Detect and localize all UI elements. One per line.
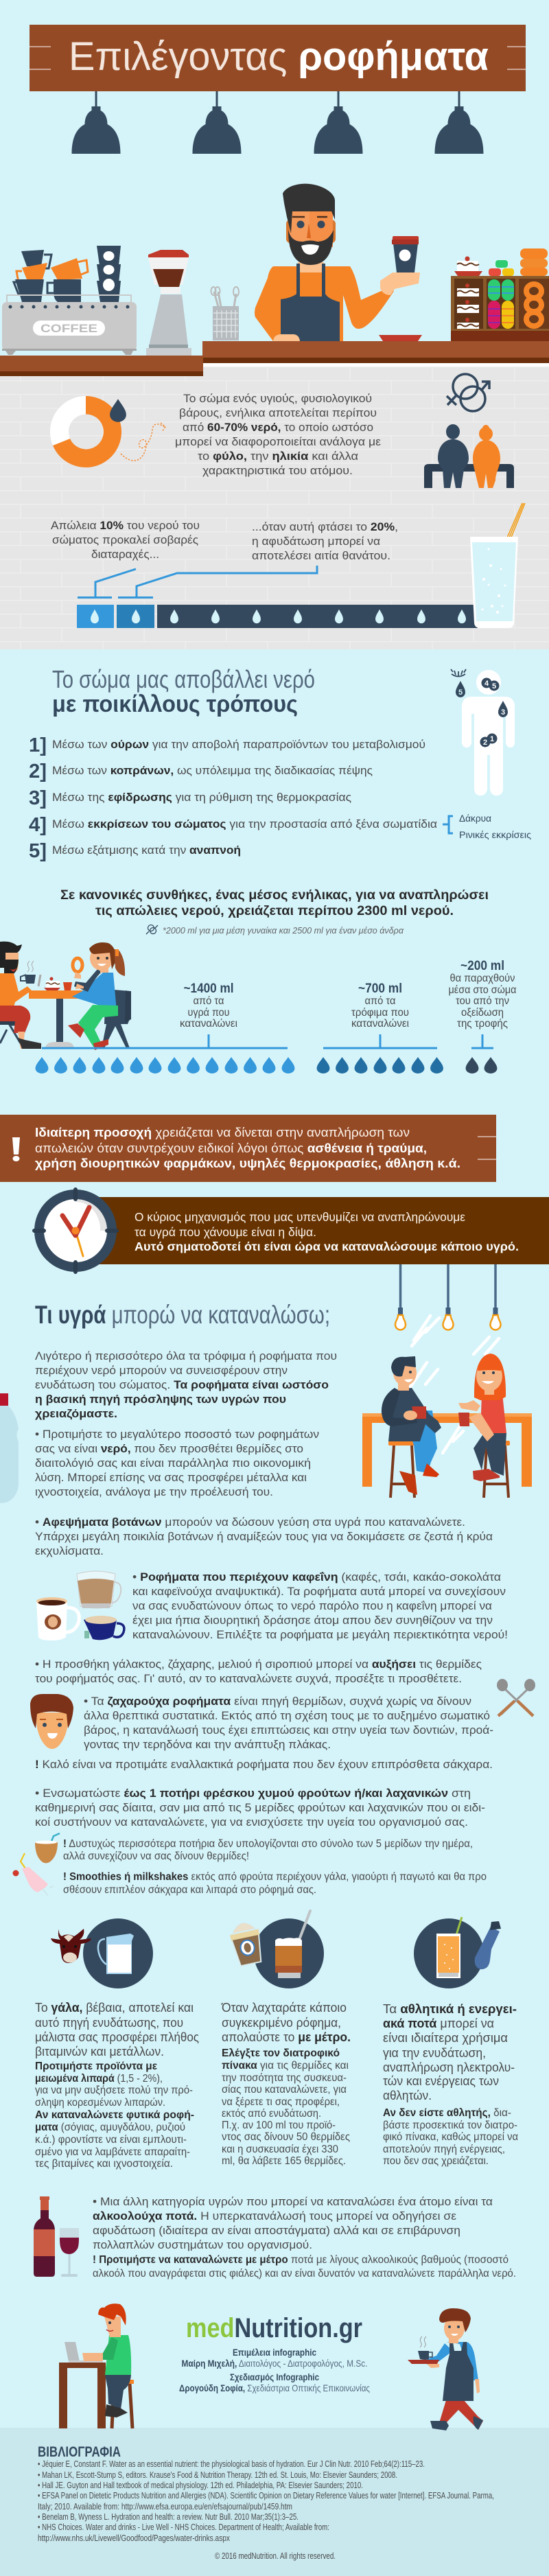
stat: 1400 ml: ~1400 ml: [184, 982, 233, 996]
column: moderation: εκτός από ενυδάτωση.: [222, 2108, 321, 2120]
column: milk: Προτιμήστε προϊόντα με: [35, 2061, 158, 2072]
secretions bracket: Ρινικές εκκρίσεις: [459, 829, 531, 840]
stat: 200 ml: του από την: [456, 995, 509, 1007]
pendant bulbs: [395, 1264, 501, 1330]
window reflections: [408, 1316, 499, 1453]
icon: exclamation: [12, 1137, 20, 1161]
body figure with numbered drops: 5: [458, 688, 463, 697]
water bar with drops: [77, 605, 478, 628]
column: milk: για να μην αυξήσετε πολύ την πρό-: [35, 2085, 193, 2096]
list: ways of losing water: [29, 734, 437, 862]
icon: coffee drinks: [229, 1911, 324, 1988]
paragraph: juice: • Ενσωματώστε έως 1 ποτήρι φρέσκου χυμού φρούτων ή/και λαχανικών στη: [35, 1787, 471, 1800]
macarons: [495, 260, 508, 268]
paragraph: water: σας να είναι νερό, που δεν προσθέτει θερμίδες στο: [35, 1442, 303, 1455]
stat: 1400 ml: καταναλώνει: [180, 1018, 237, 1030]
water loss text left: [51, 519, 200, 561]
column: milk: βιταμινών και μετάλλων.: [35, 2045, 164, 2058]
stat: 200 ml: οξείδωση: [461, 1007, 504, 1019]
column: milk: Το γάλα, βέβαια, αποτελεί και: [35, 2001, 194, 2015]
paragraph: all foods with water: η βασική πηγή πρόσληψης των υγρών που: [35, 1393, 286, 1406]
paragraph: herbal infusions: εκχυλίσματα.: [35, 1544, 104, 1557]
woman: [474, 1433, 506, 1476]
stools: [390, 1446, 509, 1498]
special attention banner: [0, 1115, 496, 1182]
column: milk: ματα (σόγιας, αμυγδάλου, ρυζιού: [35, 2122, 185, 2133]
special attention banner: απωλειών όταν συντρέχουν ειδικοί λόγοι όπως ασθένεια ή τραύμα,: [35, 1141, 427, 1155]
paragraph: additions: του ροφήματός σας. Γι' αυτό, αν το καταναλώνετε συχνά, προσέξτε τι προσθέτετε.: [35, 1672, 462, 1685]
column: milk: κ.ά.) φροντίστε να είναι εμπλουτι-: [35, 2134, 187, 2146]
woman: [104, 989, 131, 1024]
body figure with numbered drops: 1: [490, 735, 494, 743]
credits: Σχεδιασμός Infographic: [230, 2371, 319, 2382]
column: moderation: την ποσότητα της συσκευα-: [222, 2072, 347, 2084]
stat: 200 ml: ~200 ml: [460, 959, 504, 973]
footnote: *2000 ml για μια μέση γυναίκα και 2500 ml για έναν μέσο άνδρα: [163, 925, 404, 936]
donuts on top: [520, 248, 548, 276]
water glass with straws: [470, 503, 525, 628]
column: moderation: πίνακα για τις θερμίδες και: [222, 2060, 349, 2072]
column: sports drinks: ακά ποτά μπορεί να: [383, 2017, 494, 2030]
donut chart 60-70%: [50, 396, 126, 467]
paragraph: juice: καθημερινή σας δίαιτα, σαν μια από τις 5 μερίδες φρούτων και λαχανικών που οι ειδι-: [35, 1801, 485, 1814]
list: ways of losing water: 3]: [29, 787, 47, 809]
paragraph: juice: κοί συστήνουν να καταναλώνετε, για να ενισχύσετε την υγεία του οργανισμού σας.: [35, 1815, 468, 1829]
paragraph: herbal infusions: • Αφεψήματα βοτάνων μπορούν να δώσουν γεύση στα υγρά που καταναλώνετε.: [35, 1516, 465, 1529]
paragraph: additions: • Η προσθήκη γάλακτος, ζάχαρης, μελιού ή σιροπιού μπορεί να αυξήσει τις θερμίδες: [35, 1658, 482, 1671]
logo: medNutrition.gr: [186, 2313, 362, 2343]
icon: wine bottle and glass: [34, 2196, 79, 2277]
column: milk: μάλιστα σας προσφέρει πλήθος: [35, 2030, 199, 2044]
paragraph: all foods with water: [35, 1349, 337, 1420]
stat: 1400 ml: από τα: [194, 995, 224, 1007]
column: moderation: απολαύστε το με μέτρο.: [222, 2030, 351, 2044]
stat: 1400 ml: υγρά που: [188, 1007, 229, 1019]
paragraph: all foods with water: χρειαζόμαστε.: [35, 1407, 117, 1420]
intro text: Το σώμα ενός υγιούς, φυσιολογικού: [183, 392, 372, 405]
list: ways of losing water: Μέσω της εφίδρωσης για τη ρύθμιση της θερμοκρασίας: [52, 791, 351, 804]
illustration: waiter: [408, 2308, 483, 2430]
bibliography: • Hall JE. Guyton and Hall textbook of medical physiology. 12th ed. Philadelphia, PA: Elsevier Saunders; 2010.: [38, 2481, 363, 2490]
stat: 700 ml: από τα: [365, 995, 396, 1007]
cake cabinet: [451, 248, 549, 341]
stat: 700 ml: ~700 ml: [358, 982, 402, 996]
man: [0, 942, 22, 968]
column: sports drinks: [383, 2002, 518, 2167]
column: sports drinks: που δεν σας χρειάζεται.: [383, 2155, 489, 2167]
paragraph: all foods with water: Λιγότερο ή περισσότερο όλα τα τρόφιμα ή ροφήματα που: [35, 1349, 337, 1362]
column: moderation: Ελέγξτε τον διατροφικό: [222, 2047, 340, 2059]
body figure with numbered drops: 3: [501, 708, 505, 717]
column: moderation: να ξέρετε τι σας προφέρει,: [222, 2096, 340, 2108]
icon: milk: [51, 1918, 153, 1988]
column: moderation: σίας που καταναλώνετε, για: [222, 2084, 347, 2096]
thirst banner: Αυτό σηματοδοτεί ότι είναι ώρα να καταναλώσουμε κάποιο υγρό.: [135, 1240, 519, 1253]
paragraph: water: ιχνοστοιχεία, ανάλογα με την προέλευσή του.: [35, 1485, 273, 1498]
note: more glasses: ! Δυστυχώς περισσότερα ποτήρια δεν υπολογίζονται στο σύνολο των 5 μερίδων την ημέρα,: [63, 1838, 473, 1850]
intro text: μπορεί να διαφοροποιείται ανάλογα με: [175, 435, 381, 448]
drop rows: [36, 1057, 497, 1074]
column: moderation: ντος σας δίνουν 50 θερμίδες: [222, 2131, 350, 2143]
secretions bracket: [443, 813, 531, 840]
dashed arrow: [121, 423, 165, 461]
items on table: [25, 975, 36, 984]
paragraph: caffeine: καταναλώνουν. Επιλέξτε τα ροφήματα με μεγάλη περιεκτικότητα νερού!: [132, 1628, 508, 1641]
coffee machine: [2, 295, 137, 355]
body figure with numbered drops: [451, 669, 515, 796]
column: sports drinks: Τα αθλητικά ή ενεργει-: [383, 2002, 517, 2016]
barista: [255, 184, 420, 341]
stat: 200 ml: μέσα στο σώμα: [449, 984, 517, 996]
paragraph: herbal infusions: [35, 1516, 493, 1557]
list: ways of losing water: 4]: [29, 814, 47, 836]
icon: elderly couple on bench: [424, 424, 514, 488]
column: moderation: Όταν λαχταράτε κάποιο: [221, 2001, 347, 2015]
list: ways of losing water: Μέσω εκκρίσεων του σώματος για την προστασία από ξένα σωματίδια: [52, 817, 437, 831]
apron: [281, 264, 340, 341]
paragraph: sugary drinks: άλλα θρεπτικά συστατικά. Εκτός από τη σχέση τους με το αυξημένο σωματικό: [84, 1709, 490, 1722]
paragraph: sugary drinks: • Τα ζαχαρούχα ροφήματα είναι πηγή θερμίδων, συχνά χωρίς να δίνουν: [84, 1695, 471, 1708]
bibliography: http://www.nhs.uk/Livewell/Goodfood/Pages/water-drinks.aspx: [38, 2533, 231, 2543]
list: ways of losing water: 1]: [29, 734, 47, 756]
paragraph: alcohol: • Μια άλλη κατηγορία υγρών που μπορεί να καταναλώσει ένα άτομο είναι τα: [93, 2195, 493, 2208]
icon: juice cup: [35, 1833, 60, 1863]
icon: sports drinks: [414, 1917, 501, 1988]
paragraph: sugary drinks: [84, 1695, 493, 1751]
illustration: man with laptop: [59, 2304, 134, 2428]
column: sports drinks: τών και ενέργειας των: [383, 2074, 499, 2088]
special attention banner: Ιδιαίτερη προσοχή χρειάζεται να δίνεται στην αναπλήρωση των: [35, 1126, 410, 1139]
body figure with numbered drops: 5: [492, 682, 496, 691]
column: moderation: Π.χ. αν 100 ml του προϊό-: [222, 2120, 336, 2131]
paragraph: all foods with water: περιέχουν νερό μπορούν να συνεισφέρουν στην: [35, 1364, 288, 1377]
intro text: από 60-70% νερό, το οποίο ωστόσο: [183, 421, 373, 434]
note: more glasses: [63, 1838, 473, 1862]
paragraph: alcohol: αλκοόλ που αναγράφεται στις φιάλες) και αν είναι δυνατόν να καταναλώνετε παράλληλα νερό.: [93, 2268, 516, 2279]
column: sports drinks: βάστε προσεκτικά τον διατρο-: [383, 2120, 517, 2131]
water loss text right: [252, 520, 398, 562]
stat: 700 ml: τρόφιμα που: [351, 1007, 409, 1019]
icon: smoothie glass: [12, 1853, 54, 1896]
list: ways of losing water: Μέσω των κοπράνων, ως υπόλειμμα της διαδικασίας πέψης: [52, 764, 373, 777]
credits: Επιμέλεια infographic: [233, 2347, 316, 2358]
column: moderation: και η συσκευασία έχει 330: [222, 2144, 338, 2155]
column: milk: μειωμένα λιπαρά (1,5 - 2%),: [35, 2073, 163, 2085]
column: sports drinks: Αν δεν είστε αθλητής, δια-: [383, 2107, 511, 2119]
water loss text right: αποτελέσει αιτία θανάτου.: [252, 549, 390, 562]
heading: what can I drink: Τι υγρά μπορώ να καταναλώσω;: [35, 1301, 330, 1329]
footer background: [0, 2428, 549, 2576]
table: [362, 1413, 532, 1423]
column: milk: τες βιταμίνες και ιχνοστοιχεία.: [35, 2158, 173, 2170]
paragraph: all foods with water: ενυδάτωση του σώματος. Τα ροφήματα είναι ωστόσο: [35, 1378, 329, 1391]
title banner: [30, 25, 526, 91]
paragraph: alcohol: ! Προτιμήστε να καταναλώνετε με μέτρο ποτά με λίγους αλκοολικούς βαθμούς (ποσοστό: [93, 2254, 509, 2266]
paragraph: caffeine: [132, 1570, 508, 1641]
column: moderation: [221, 2001, 351, 2167]
coffee machine: COFFEE: [40, 322, 97, 335]
stat: 700 ml: καταναλώνει: [351, 1018, 409, 1030]
replacement statement: τις απώλειες νερού, χρειάζεται περίπου 2300 ml νερού.: [95, 904, 454, 918]
column: milk: σληψη κορεσμένων λιπαρών.: [35, 2097, 165, 2109]
body figure with numbered drops: 4: [484, 680, 489, 688]
icon: eye: [451, 669, 466, 677]
icon: boy face: [30, 1694, 73, 1749]
counter: [0, 341, 549, 376]
column: sports drinks: για την ενυδάτωση,: [383, 2046, 486, 2060]
stat: 200 ml: της τροφής: [457, 1018, 508, 1030]
connector lines: [78, 566, 317, 597]
water loss text right: η αφυδάτωση μπορεί να: [252, 535, 380, 548]
cake: [457, 261, 478, 271]
bibliography: Italy; 2010. Available from: http://www.efsa.europa.eu/en/efsajournal/pub/1459.htm: [38, 2502, 292, 2511]
paragraph: caffeine: και καφεϊνούχα αναψυκτικά). Τα ροφήματα αυτά μπορεί να συνεχίσουν: [132, 1585, 506, 1598]
list: ways of losing water: 5]: [29, 840, 47, 862]
paragraph: water: λύση. Μπορεί επίσης να σας προσφέρει μέταλλα και: [35, 1471, 307, 1484]
secretions bracket: Δάκρυα: [459, 813, 491, 824]
water loss text left: Απώλεια 10% του νερού του: [51, 519, 200, 532]
title: Επιλέγοντας ροφήματα: [69, 34, 489, 79]
column: moderation: συγκεκριμένο ρόφημα,: [222, 2016, 341, 2030]
stat: 1400 ml: [180, 982, 237, 1030]
hanging lamps: [71, 91, 483, 154]
saucer: [379, 335, 422, 341]
water loss text left: σώματος προκαλεί σοβαρές: [52, 533, 198, 546]
column: moderation: ml, θα λάβετε 165 θερμίδες.: [222, 2155, 346, 2167]
paragraph: additions: [35, 1658, 482, 1685]
list: ways of losing water: Μέσω εξάτμισης κατά την αναπνοή: [52, 844, 241, 857]
shirt and arms: [255, 266, 394, 341]
man: [401, 1411, 437, 1473]
paragraph: alcohol: πολλαπλών συστημάτων του οργανισμού.: [93, 2238, 312, 2251]
consumption brackets: [42, 1034, 493, 1049]
bibliography: [38, 2444, 494, 2543]
icon: gender symbols: [447, 374, 489, 411]
paragraph: caffeine: • Ροφήματα που περιέχουν καφεΐνη (καφές, τσάι, κακάο-σοκολάτα: [132, 1570, 501, 1583]
bibliography: • NHS Choices. Water and drinks - Live Well - NHS Choices. Department of Health; Available from:: [38, 2522, 329, 2532]
column: sports drinks: φικό πίνακα, καθώς μπορεί να: [383, 2131, 518, 2143]
water bottle: [0, 1393, 19, 1503]
intro text: βάρους, ενήλικα αποτελείται περίπου: [179, 406, 377, 419]
bibliography: • Mahan LK, Escott-Stump S, editors. Krause's Food & Nutrition Therapy. 12th ed. St. Louis, Mo: Elsevier Saunders; 2008.: [38, 2470, 397, 2480]
credits: Δρογούδη Σοφία, Σχεδιάστρια Οπτικής Επικοινωνίας: [179, 2382, 370, 2393]
replacement statement: Σε κανονικές συνθήκες, ένας μέσος ενήλικας, για να αναπληρώσει: [60, 888, 489, 903]
takeaway cup: [392, 236, 419, 272]
paragraph: alcohol: αλκοολούχα ποτά. Η υπερκατανάλωσή τους μπορεί να οδηγήσει σε: [93, 2209, 456, 2223]
paragraph: caffeine: να σας ενυδατώνουν όπως το νερό παρόλο που η καφεΐνη μπορεί να: [132, 1599, 492, 1612]
brick wall: [0, 363, 549, 649]
column: sports drinks: είναι ιδιαίτερα χρήσιμα: [383, 2031, 508, 2045]
paragraph: alcohol: [93, 2195, 516, 2279]
bibliography: ΒΙΒΛΙΟΓΡΑΦΙΑ: [38, 2444, 121, 2460]
thirst banner: [89, 1197, 549, 1264]
bibliography: • Benelam B, Wyness L. Hydration and health: a review. Nutr Bull. 2010 Mar;35(1):3–25.: [38, 2512, 299, 2522]
utensils jar: [211, 287, 239, 340]
note: smoothies: σθέσουν επιπλέον σάκχαρα και λιπαρά στο ρόφημά σας.: [63, 1884, 316, 1896]
note: smoothies: [63, 1871, 487, 1896]
note: smoothies: ! Smoothies ή milkshakes εκτός από φρούτα περιέχουν γάλα, γιαούρτι ή παγωτό και θα προ: [63, 1871, 487, 1883]
column: sports drinks: αποτελούν πηγή ενέργειας,: [383, 2144, 505, 2155]
paragraph: water: διαιτολόγιό σας και είναι παράλληλα πιο οικονομική: [35, 1457, 311, 1470]
cow: [51, 1929, 91, 1963]
heading: body loses water: με ποικίλλους τρόπους: [52, 691, 298, 717]
column: milk: Αν καταναλώνετε φυτικά ροφή-: [35, 2109, 194, 2121]
column: sports drinks: αθλητών.: [383, 2089, 432, 2102]
column: sports drinks: αναπλήρωση ηλεκτρολυ-: [383, 2061, 515, 2074]
paragraph: juice: [35, 1787, 485, 1829]
paragraph: water: [35, 1428, 319, 1498]
paragraph: sugary drinks: βάρος, η κατανάλωσή τους έχει επιπτώσεις και στην υγεία των δοντιών, προά-: [84, 1724, 493, 1737]
list: ways of losing water: 2]: [29, 761, 47, 782]
icon: caffeinated drinks: [36, 1571, 124, 1640]
heading: body loses water: [52, 665, 315, 717]
credits: [179, 2347, 370, 2393]
icon: water drop: [110, 399, 126, 422]
intro text: χαρακτηριστικά του ατόμου.: [202, 464, 353, 477]
heading: body loses water: Το σώμα μας αποβάλλει νερό: [52, 665, 315, 693]
head: [286, 220, 336, 243]
list: ways of losing water: Μέσω των ούρων για την αποβολή παραπροϊόντων του μεταβολισμού: [52, 738, 425, 751]
column: milk: σμένο για να λαμβάνετε απαραίτη-: [35, 2146, 190, 2158]
note: more glasses: αλλά συνεχίζουν να σας δίνουν θερμίδες!: [63, 1850, 249, 1862]
stat: 200 ml: [449, 959, 517, 1030]
hair and beard: [283, 184, 335, 233]
bibliography: • Jéquier E, Constant F. Water as an essential nutrient: the physiological basis of hydration. Eur J Clin Nutr. 2010 Feb;64(2):115–23.: [38, 2459, 425, 2469]
copyright: © 2016 medNutrition. All rights reserved.: [215, 2551, 336, 2561]
table: [29, 990, 91, 999]
paragraph: herbal infusions: Υπάρχει μεγάλη ποικιλία βοτάνων ή αναμίξεών τους για να δοκιμάσετε σε ζεστά ή κρύα: [35, 1530, 493, 1543]
intro text: [175, 392, 381, 477]
paragraph: caffeine: έχει μια ήπια διουρητική δράσησε άτομ απου δεν συνηθίζουν να την: [132, 1614, 493, 1627]
thirst banner: Ο κύριος μηχανισμός που μας υπενθυμίζει να αναπληρώνουμε: [135, 1210, 465, 1224]
water loss text left: διαταραχές...: [91, 548, 159, 561]
stacked cups: [14, 246, 121, 302]
icon: clock: [34, 1190, 117, 1272]
icon: crossed spoons: [497, 1679, 535, 1716]
body figure with numbered drops: 2: [483, 739, 487, 747]
paragraph: water: • Προτιμήστε το μεγαλύτερο ποσοστό των ροφημάτων: [35, 1428, 319, 1441]
stat: 700 ml: [351, 982, 409, 1030]
water loss text right: ...όταν αυτή φτάσει το 20%,: [252, 520, 398, 533]
replacement statement: [60, 888, 489, 918]
column: milk: αυτό πηγή ενυδάτωσης, που: [35, 2016, 183, 2030]
special attention banner: χρήση διουρητικών φαρμάκων, υψηλές θερμοκρασίες, άθληση κ.ά.: [35, 1157, 460, 1170]
credits: Μαίρη Μιχελή, Διαιτολόγος - Διατροφολόγος, M.Sc.: [181, 2358, 368, 2369]
intro text: το φύλο, την ηλικία και άλλα: [198, 450, 358, 463]
coffee grinder: [146, 250, 191, 356]
note: no added sugar: ! Καλό είναι να προτιμάτε εναλλακτικά ροφήματα που δεν έχουν επιπρόσθετα σάκχαρα.: [35, 1758, 493, 1771]
chair left: [0, 1020, 23, 1048]
illustration: couple at table: [0, 942, 131, 1050]
stat: 200 ml: θα παραχθούν: [450, 973, 515, 984]
illustration: couple at high table: [362, 1354, 532, 1498]
paragraph: alcohol: αφυδάτωση (ιδιαίτερα αν είναι αποστάγματα) αλλά και σε επιβάρυνση: [93, 2224, 460, 2237]
paragraph: sugary drinks: γοντας την τερηδόνα και την ανάπτυξη πλάκας.: [84, 1738, 331, 1751]
column: milk: [35, 2001, 199, 2170]
thirst banner: τα υγρά που χάνουμε είναι η δίψα.: [135, 1225, 316, 1239]
